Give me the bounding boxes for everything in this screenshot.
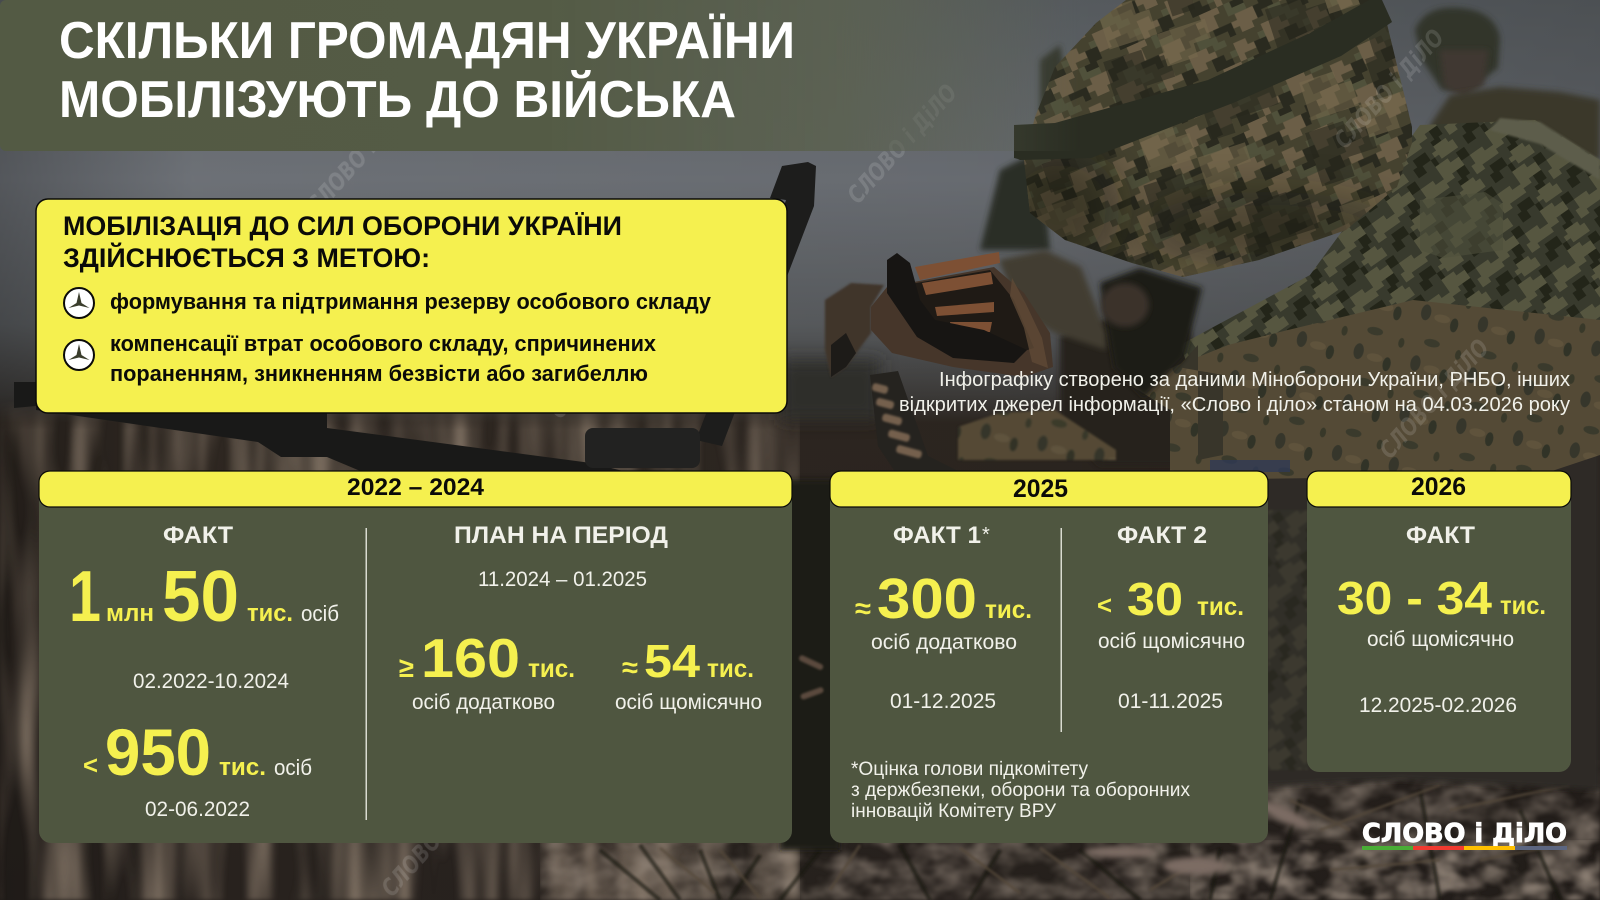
date: 11.2024 – 01.2025 [478,568,647,591]
stat: 1 million 50 thousand: тис. [247,600,293,627]
watermarks: СЛОВО і ДіЛО [302,89,423,219]
stat: about 54 thousand: осіб щомісячно [615,691,762,714]
stat: 1 million 50 thousand: 50 [162,557,239,637]
header bar [39,471,792,507]
stat: 30–34 thousand: 30 - 34 [1337,572,1492,624]
source note [899,369,1570,416]
watermarks: СЛОВО і ДіЛО [842,79,963,209]
watermarks: СЛОВО і ДіЛО [376,772,497,900]
footnote [851,758,1190,822]
watermarks [302,24,1495,900]
header bar: 2022 – 2024 [347,474,485,501]
source note: Інфографіку створено за даними Міноборони України, РНБО, інших [939,369,1570,391]
bullet text [110,331,657,386]
stat: 30–34 thousand [1337,572,1546,651]
soldier in background [980,8,1600,250]
stat: 30–34 thousand: осіб щомісячно [1367,628,1514,651]
stat: at least 160 thousand: ≥ [399,652,414,683]
footnote: з держбезпеки, оборони та оборонних [851,779,1190,801]
header bar [1307,471,1571,507]
bullet text: пораненням, зникненням безвісти або загибеллю [110,361,648,386]
heading: fact: ФАКТ [163,522,233,549]
stat: under 30 thousand: осіб щомісячно [1098,630,1245,653]
heading: fact 2: ФАКТ 2 [1117,522,1207,549]
stat: at least 160 thousand [399,627,575,714]
stat: under 950 thousand: осіб [274,755,312,780]
stat: under 950 thousand: тис. [219,754,266,781]
stat: about 54 thousand: тис. [707,655,754,683]
source note: відкритих джерел інформації, «Слово і діло» станом на 04.03.2026 року [899,394,1570,416]
stat: about 300 thousand: тис. [985,596,1032,624]
date: 01-12.2025 [890,690,996,713]
title: МОБІЛІЗУЮТЬ ДО ВІЙСЬКА [59,70,736,129]
helmet [1000,0,1420,290]
stat: 1 million 50 thousand: 1 [69,557,101,637]
heading: fact 1: * [982,524,990,546]
stat: under 950 thousand: < [83,750,98,780]
icon: trident bullet [64,288,94,318]
stat: at least 160 thousand: тис. [528,655,575,683]
title [59,12,795,129]
panel: 2022–2024 [39,471,792,843]
stat: about 54 thousand: 54 [644,635,700,687]
heading: plan: ПЛАН НА ПЕРІОД [454,522,668,549]
panel: 2025 [830,471,1268,843]
date: 12.2025-02.2026 [1359,694,1517,717]
heading: ЗДІЙСНЮЄТЬСЯ З МЕТОЮ: [63,242,430,273]
stat: about 54 thousand: ≈ [622,652,638,683]
header bar: 2026 [1411,473,1466,501]
header bar [830,471,1268,507]
date: 02-06.2022 [145,798,250,821]
ammunition belt [870,371,968,506]
stat: about 300 thousand: осіб додатково [871,631,1017,654]
header bar: 2025 [1013,475,1068,503]
stat: at least 160 thousand: 160 [421,627,520,689]
date: 01-11.2025 [1118,690,1223,713]
stat: 1 million 50 thousand: млн [106,600,154,627]
machine gun [14,162,840,850]
panel: mobilisation purposes [36,199,787,413]
stat: about 54 thousand [615,635,762,714]
heading [63,211,622,273]
stat: under 950 thousand [83,715,312,789]
date: 02.2022-10.2024 [133,670,289,693]
ground with dry grass [600,785,1570,900]
stat: under 950 thousand: 950 [105,715,211,789]
soldier body and vest [958,118,1600,790]
gloved hand holding cartridges [825,252,1053,377]
footnote: інновацій Комітету ВРУ [851,800,1057,822]
stat: under 30 thousand [1097,573,1245,653]
stat: 1 million 50 thousand: осіб [301,601,339,626]
logo: Слово і Діло: СЛОВО і ДіЛО [1362,819,1567,849]
watermarks: СЛОВО і ДіЛО [1374,334,1495,464]
stat: at least 160 thousand: осіб додатково [412,691,555,714]
shells near the gun [798,654,824,700]
stat: about 300 thousand: ≈ [855,593,871,624]
stat: under 30 thousand: < [1097,590,1112,620]
heading: fact 1: ФАКТ 1 [893,522,981,549]
title banner [0,0,1080,151]
title: СКІЛЬКИ ГРОМАДЯН УКРАЇНИ [59,12,795,70]
panel: 2026 [1307,471,1571,772]
stat: about 300 thousand: 300 [877,567,977,631]
stat: 30–34 thousand: тис. [1500,592,1546,620]
watermarks: СЛОВО і ДіЛО [544,294,665,424]
footnote: *Оцінка голови підкомітету [851,758,1088,780]
stat: under 30 thousand: 30 [1127,573,1183,625]
bullet text: формування та підтримання резерву особового складу [110,289,712,314]
stat: under 30 thousand: тис. [1197,593,1244,621]
heading: fact: ФАКТ [1406,522,1475,549]
bullet text: компенсації втрат особового складу, спричинених [110,331,657,356]
heading: МОБІЛІЗАЦІЯ ДО СИЛ ОБОРОНИ УКРАЇНИ [63,211,622,241]
icon: trident bullet [64,340,94,370]
stat: 1 million 50 thousand [69,557,339,637]
stat: about 300 thousand [855,567,1032,654]
